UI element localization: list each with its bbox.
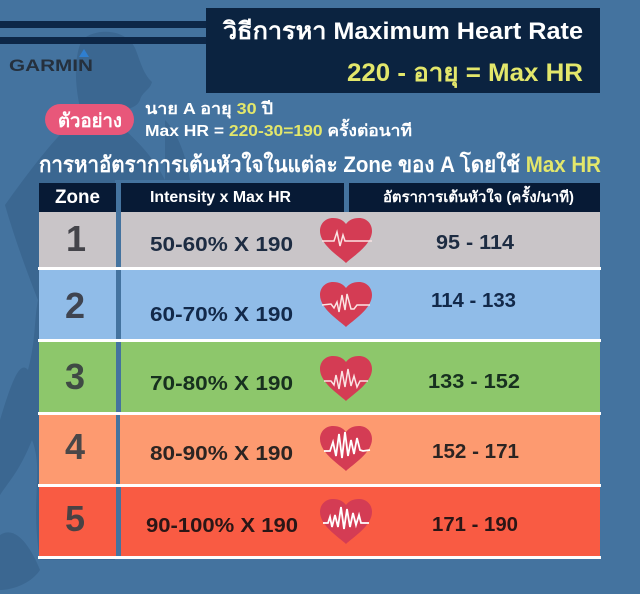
title: วิธีการหา Maximum Heart Rate bbox=[222, 18, 583, 45]
row 4 bbox=[39, 415, 600, 484]
row 4: 152 - 171 bbox=[432, 441, 519, 463]
row 3 bbox=[39, 342, 600, 412]
row 1: 95 - 114 bbox=[436, 232, 515, 254]
row 1: 1 bbox=[66, 218, 86, 259]
row 1: 50-60% X 190 bbox=[150, 234, 293, 256]
example text: Max HR = 220-30=190 ครั้งต่อนาที bbox=[145, 118, 412, 140]
row 4: 4 bbox=[65, 426, 85, 467]
row 1 bbox=[39, 212, 600, 268]
example badge bbox=[45, 104, 134, 135]
title panel bbox=[206, 8, 600, 93]
formula: 220 - อายุ = Max HR bbox=[347, 59, 583, 89]
logo: Garmin: GARMIN bbox=[9, 56, 93, 75]
table header: Intensity x Max HR bbox=[150, 189, 291, 206]
row 5: 5 bbox=[65, 498, 85, 539]
icon: heart bbox=[320, 426, 372, 471]
row 2 bbox=[39, 270, 600, 340]
runner silhouette bbox=[0, 32, 190, 590]
icon: heart bbox=[320, 282, 372, 327]
row 2: 2 bbox=[65, 285, 85, 326]
example badge: ตัวอย่าง bbox=[58, 111, 122, 132]
section heading: การหาอัตราการเต้นหัวใจในแต่ละ Zone ของ A โดยใช้ Max HR bbox=[39, 151, 601, 177]
table header: Zone bbox=[55, 187, 100, 208]
icon: heart bbox=[320, 218, 372, 263]
example text: นาย A อายุ 30 ปี bbox=[145, 99, 273, 119]
table header bbox=[39, 183, 600, 212]
logo: Garmin bbox=[9, 49, 93, 75]
icon: heart bbox=[320, 499, 372, 544]
row 2: 60-70% X 190 bbox=[150, 304, 293, 326]
row 5: 171 - 190 bbox=[432, 514, 518, 536]
row 5: 90-100% X 190 bbox=[146, 515, 298, 537]
row 3: 3 bbox=[65, 356, 85, 397]
row 3: 70-80% X 190 bbox=[150, 373, 293, 395]
row 2: 114 - 133 bbox=[431, 290, 516, 312]
example text bbox=[145, 99, 412, 140]
icon: heart bbox=[320, 356, 372, 401]
row 4: 80-90% X 190 bbox=[150, 443, 293, 465]
row separators bbox=[38, 267, 601, 559]
table header: อัตราการเต้นหัวใจ (ครั้ง/นาที) bbox=[383, 185, 574, 206]
header stripes bbox=[0, 21, 206, 44]
row 3: 133 - 152 bbox=[428, 371, 520, 393]
row 5 bbox=[39, 487, 600, 557]
